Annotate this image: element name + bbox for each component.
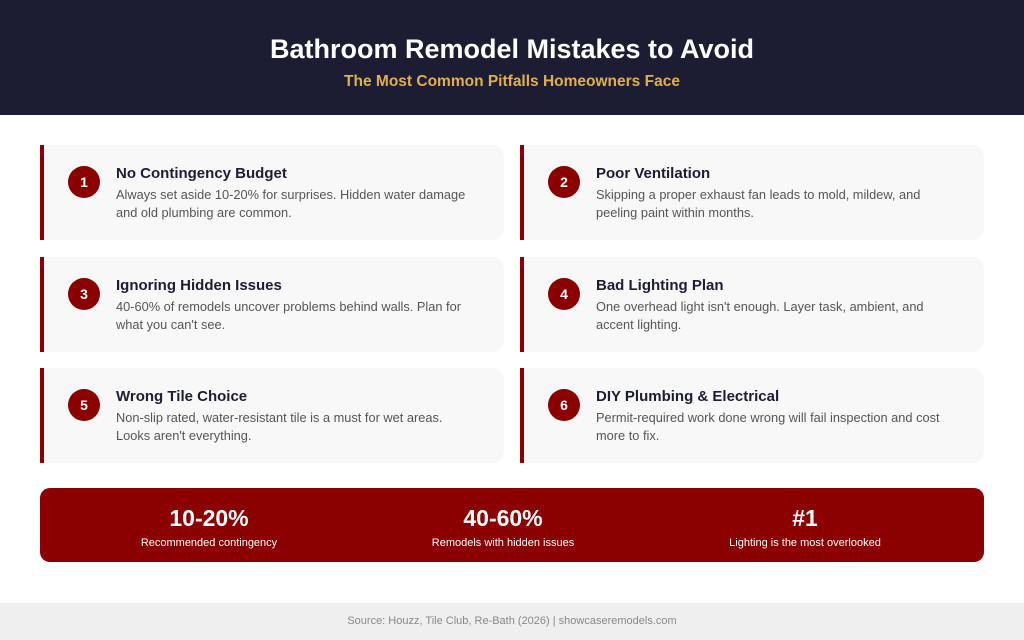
card 2 [520,145,984,240]
card 4: One overhead light isn't enough. Layer task, ambient, and [596,299,924,314]
stat 3: Lighting is the most overlooked [729,537,881,549]
card 6: 6 [560,397,568,413]
stat 2: 40-60% [463,505,543,531]
stat 3: #1 [792,505,818,531]
header [0,0,1024,115]
stat 3 [729,505,881,549]
card 3: what you can't see. [116,317,225,332]
card 6: more to fix. [596,428,659,443]
card 4: Bad Lighting Plan [596,277,724,294]
card 2: peeling paint within months. [596,205,754,220]
card 4: accent lighting. [596,317,681,332]
card 3: 40-60% of remodels uncover problems behind walls. Plan for [116,299,461,314]
footer [0,603,1024,640]
card 4 [520,257,984,352]
card 6: Permit-required work done wrong will fail inspection and cost [596,410,940,425]
card 2: Poor Ventilation [596,165,710,182]
stat 1 [141,505,278,549]
card 1: and old plumbing are common. [116,205,292,220]
subtitle: The Most Common Pitfalls Homeowners Face [344,73,680,90]
card 3: Ignoring Hidden Issues [116,277,282,294]
card 6 [520,368,984,463]
card 1 [40,145,504,240]
card 5: Wrong Tile Choice [116,388,247,405]
stat 1: Recommended contingency [141,537,277,549]
card 4: 4 [560,286,568,302]
stats banner [40,488,984,562]
card 1: 1 [80,174,88,190]
stat 2 [432,505,574,549]
card 1: Always set aside 10-20% for surprises. Hidden water damage [116,187,465,202]
title: Bathroom Remodel Mistakes to Avoid [270,34,754,64]
card 5: 5 [80,397,88,413]
card 5 [40,368,504,463]
card 1: No Contingency Budget [116,165,287,182]
card 5: Looks aren't everything. [116,428,251,443]
footer: Source: Houzz, Tile Club, Re-Bath (2026) | showcaseremodels.com [347,615,677,627]
card 3 [40,257,504,352]
stat 2: Remodels with hidden issues [432,537,574,549]
stat 1: 10-20% [169,505,249,531]
card 5: Non-slip rated, water-resistant tile is a must for wet areas. [116,410,442,425]
card 6: DIY Plumbing & Electrical [596,388,779,405]
card 2: Skipping a proper exhaust fan leads to mold, mildew, and [596,187,920,202]
card 2: 2 [560,174,568,190]
card 3: 3 [80,286,88,302]
